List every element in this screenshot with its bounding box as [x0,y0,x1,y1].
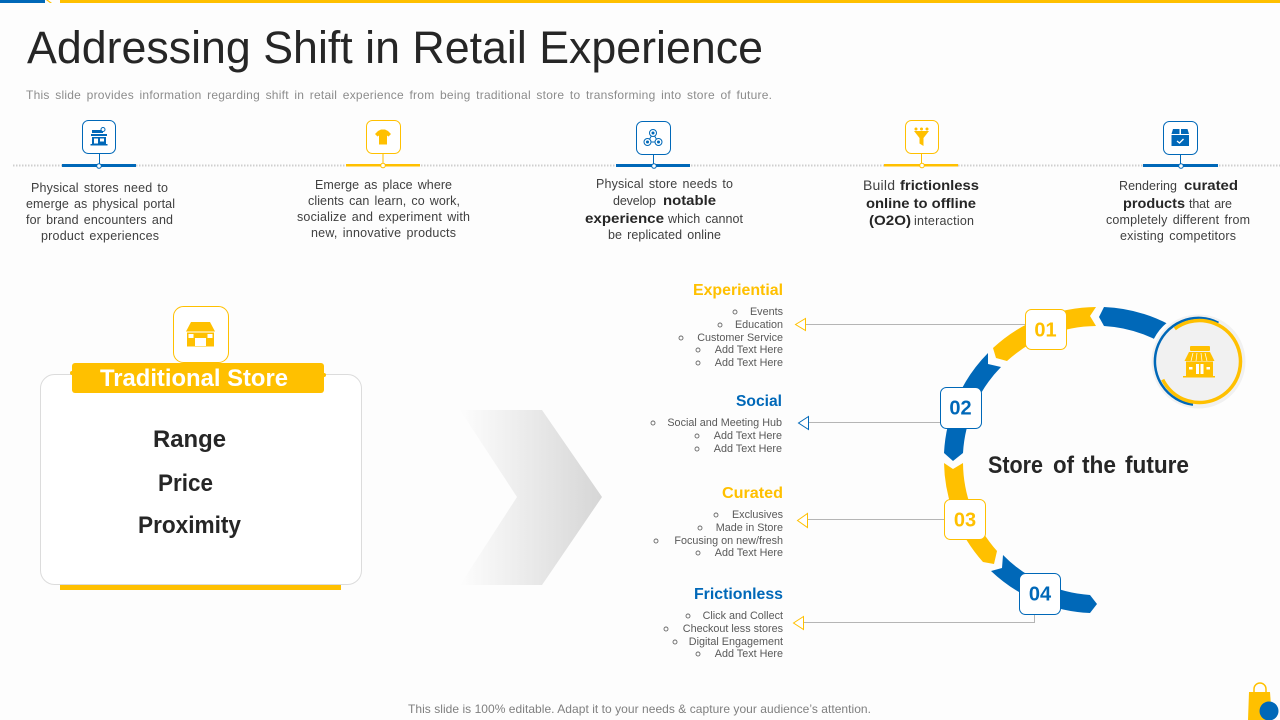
diagram centre label: Store [988,452,1043,479]
factor list [138,426,242,539]
text block: be replicated online [608,228,721,242]
text block: Physical stores need to [31,181,168,195]
list: social: Social [736,393,782,410]
arrow: connector 02 [798,416,941,430]
factor list: Range [153,426,226,453]
list: experiential: Education [735,319,783,331]
text block: Physical store needs to [596,177,733,191]
text block: online to offline [866,195,976,211]
panel: notable experience [585,122,744,242]
panel: frictionless [863,120,979,228]
list: curated: Focusing on new/fresh [674,535,783,547]
text block: interaction [914,214,974,228]
text block: emerge as physical portal [26,197,175,211]
list: social: Add Text Here [714,430,782,442]
text block: Rendering [1119,179,1177,193]
text block: that are [1189,197,1232,211]
diagram centre label: the [1082,452,1116,479]
arrow: connector 04 [794,613,1034,630]
text block: which cannot [667,212,744,226]
panel: traditional store [40,306,362,590]
circular arrow diagram [944,307,1170,613]
text block: (O2O) [869,212,911,228]
list: frictionless: Add Text Here [715,648,783,660]
text block: notable [663,192,716,208]
badge 03: 03 [954,510,976,532]
arrow: transition chevron [460,410,602,585]
text block [26,181,175,243]
heading label: Traditional Store [100,365,288,392]
icon: shopping bag logo [1248,683,1278,720]
list: social: Social and Meeting Hub [667,417,782,429]
diagram centre label: future [1125,452,1189,479]
text block: frictionless [900,177,979,193]
list: experiential: Customer Service [697,332,783,344]
list: experiential: Add Text Here [715,344,783,356]
list: curated: Add Text Here [715,547,783,559]
list: social [651,393,782,455]
text block: socialize and experiment with [297,210,470,224]
text block: new, innovative products [311,226,456,240]
list: curated [654,485,784,559]
badge 02 [940,388,982,428]
icon: traditional store [174,306,228,362]
text block: clients can learn, co work, [308,194,460,208]
icon: funnel [906,120,938,154]
text block: Emerge as place where [315,178,452,192]
list: curated: Made in Store [716,522,783,534]
text block: experience [585,210,664,226]
list: frictionless: Frictionless [694,586,783,603]
list: experiential: Events [750,306,784,318]
list: frictionless: Click and Collect [703,610,783,622]
badge 04: 04 [1029,584,1052,606]
text block: product experiences [41,229,159,243]
heading label [70,363,326,393]
list: curated: Curated [722,485,783,502]
list: experiential [679,282,784,369]
top accent bar [0,0,1280,3]
title: Addressing Shift in Retail Experience [27,22,763,73]
badge 04 [1020,574,1060,614]
list: experiential: Add Text Here [715,357,783,369]
arrow: connector 01 [796,318,1026,330]
panel: physical stores [26,120,175,243]
diagram centre label: of [1053,452,1075,479]
text block: for brand encounters and [26,213,173,227]
icon: box with check [1164,122,1198,154]
icon: store of the future [1150,313,1247,410]
icon: network of people [636,122,670,154]
badge 01 [1026,310,1066,350]
text block [1106,177,1250,243]
text block: completely different from [1106,213,1250,227]
icon: storefront [82,120,116,154]
text block: Build [863,177,895,193]
icon: t-shirt [366,120,400,154]
footer note: This slide is 100% editable. Adapt it to your needs & capture your audience’s attention. [408,702,871,716]
badge 02: 02 [949,398,972,420]
panel: curated products [1106,122,1250,243]
list: frictionless: Digital Engagement [689,636,783,648]
text block [297,178,470,240]
text block: existing competitors [1120,229,1236,243]
badge 03 [944,500,986,540]
subtitle: This slide provides information regarding shift in retail experience from being traditional store to transforming into store of future. [26,88,772,102]
list: frictionless [664,586,784,660]
list: experiential: Experiential [693,282,783,299]
text block: products [1123,195,1185,211]
arrow: connector 03 [798,514,945,528]
factor list: Price [158,470,213,497]
text block: curated [1184,177,1238,193]
text block [585,177,744,242]
list: social: Add Text Here [714,443,782,455]
list: frictionless: Checkout less stores [683,623,784,635]
list: curated: Exclusives [732,509,784,521]
text block: develop [613,194,656,208]
diagram centre label [988,452,1189,479]
badge 01: 01 [1034,320,1057,342]
text block [863,177,979,228]
factor list: Proximity [138,512,242,539]
panel: emerge as place [297,120,470,240]
